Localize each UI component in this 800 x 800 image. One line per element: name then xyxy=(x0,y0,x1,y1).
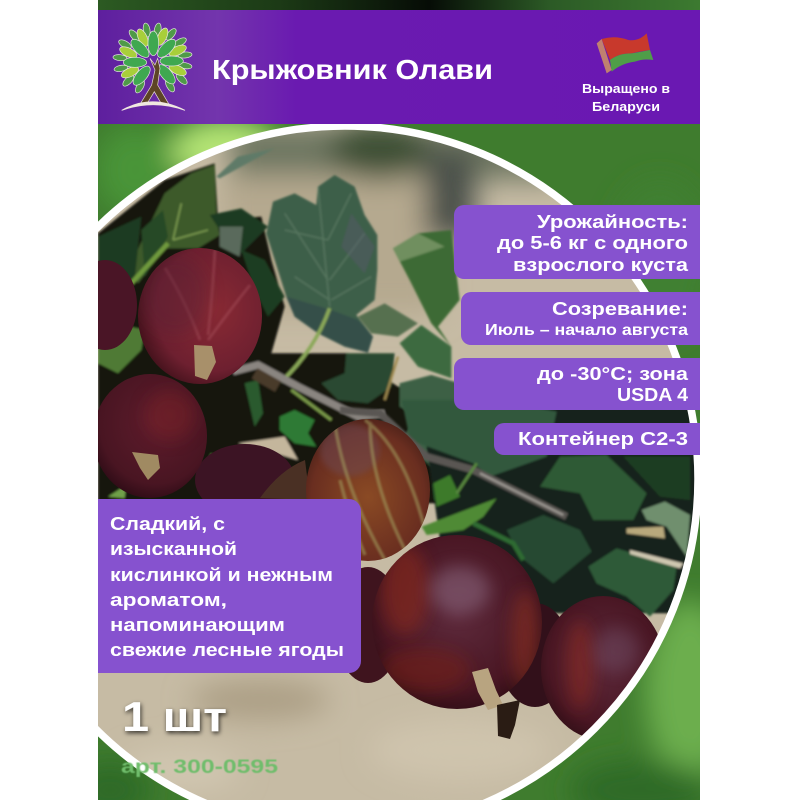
circle outline xyxy=(98,124,700,800)
product card xyxy=(98,0,700,800)
article number: арт. 300-0595 xyxy=(121,757,279,778)
quantity: 1 шт xyxy=(122,693,227,740)
berry top xyxy=(138,248,262,384)
large leaf xyxy=(266,175,377,353)
panel: taste description: Сладкий, с xyxy=(110,513,225,534)
origin label: Беларуси xyxy=(592,100,660,114)
header band xyxy=(98,10,700,124)
branch xyxy=(233,365,385,417)
panel: ripening: Созревание: xyxy=(552,299,688,319)
panel: ripening xyxy=(461,292,700,345)
panel: ripening: Июль – начало августа xyxy=(485,322,688,339)
icon: Belarus flag xyxy=(597,33,653,73)
panel: container xyxy=(494,423,700,455)
panel: hardiness: USDA 4 xyxy=(617,385,688,405)
origin label: Выращено в xyxy=(582,82,670,96)
panel: yield: Урожайность: xyxy=(537,212,688,232)
berry left xyxy=(93,374,207,498)
berries behind xyxy=(195,444,292,499)
background and photo xyxy=(98,0,700,800)
panel: taste description xyxy=(98,499,361,673)
striped berry xyxy=(306,419,430,561)
panel: container: Контейнер С2-3 xyxy=(518,429,688,449)
panel: hardiness: до -30°С; зона xyxy=(537,364,689,384)
panel: yield: до 5-6 кг с одного xyxy=(497,233,688,253)
gooseberries xyxy=(73,248,665,740)
product title: Крыжовник Олави xyxy=(212,54,493,85)
panel: taste description: напоминающим xyxy=(110,614,285,635)
panel: taste description: изысканной xyxy=(110,538,237,559)
berry large xyxy=(541,596,665,740)
origin label xyxy=(582,82,670,114)
panel: taste description: свежие лесные ягоды xyxy=(110,639,344,660)
foliage upper left (photo coordinates) xyxy=(98,148,465,503)
logo: tree xyxy=(113,23,192,110)
panel: hardiness xyxy=(454,358,700,410)
photo circle xyxy=(98,130,694,800)
foliage lower right (photo coordinates) xyxy=(340,400,700,617)
panel: yield xyxy=(454,205,700,279)
panel: taste description: кислинкой и нежным xyxy=(110,564,333,585)
panel: yield: взрослого куста xyxy=(513,255,689,275)
panel: taste description: ароматом, xyxy=(110,589,227,610)
